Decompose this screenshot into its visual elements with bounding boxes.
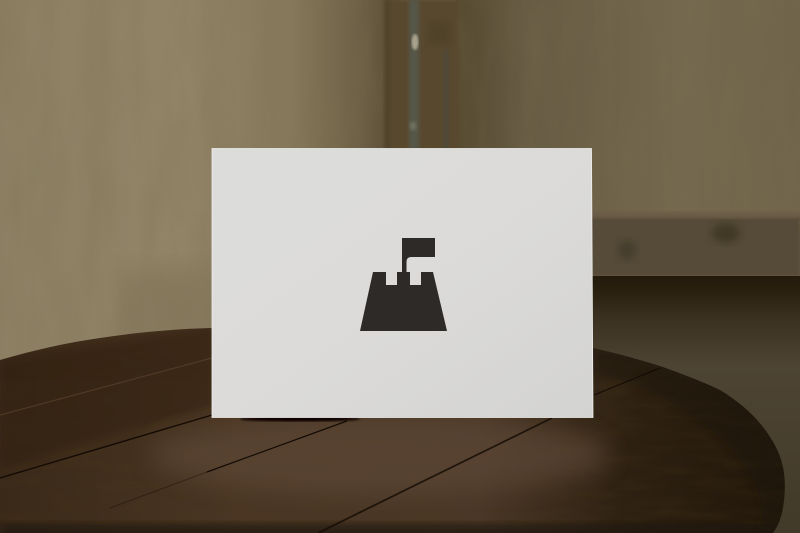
- icon: sandcastle with flag: [360, 238, 447, 331]
- background wall, left: [0, 0, 400, 380]
- flag and pole: [402, 238, 435, 272]
- wooden table top: [0, 320, 800, 533]
- wooden rail, right: [590, 212, 800, 276]
- card shadow: [240, 416, 360, 422]
- plank seams: [0, 358, 660, 533]
- white card: [212, 148, 593, 418]
- lower wall, right: [590, 276, 800, 533]
- dark back rim, right: [594, 350, 708, 406]
- castle base: [360, 272, 447, 331]
- background wall, right: [455, 0, 800, 225]
- light on wood below card: [150, 415, 610, 495]
- dark bottom edge: [0, 524, 800, 533]
- wooden post: [384, 0, 459, 160]
- left plank shading: [30, 328, 212, 448]
